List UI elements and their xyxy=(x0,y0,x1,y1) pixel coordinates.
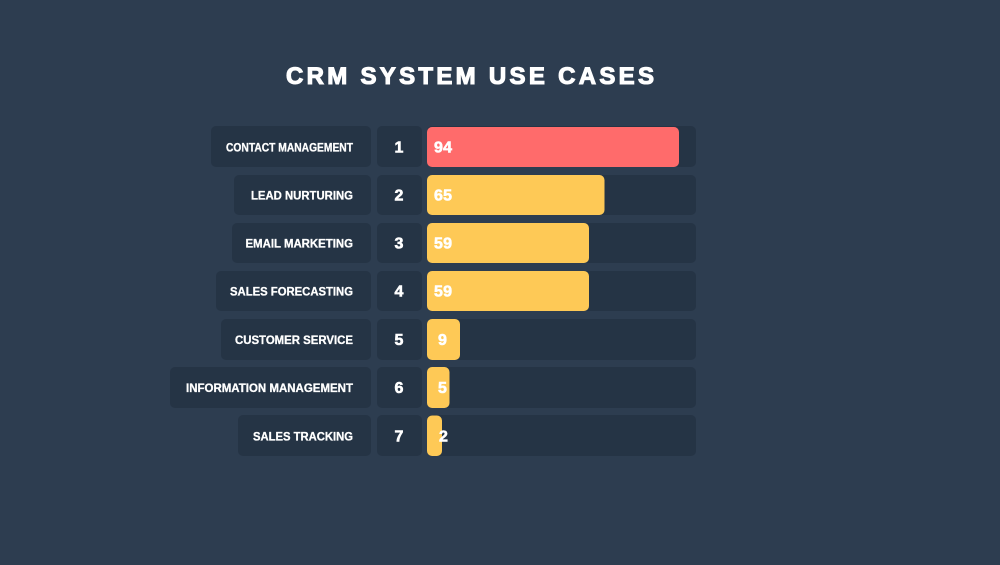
row 6: information management xyxy=(170,367,696,408)
title: CRM SYSTEM USE CASES xyxy=(286,63,654,90)
row 1: contact management: CONTACT MANAGEMENT xyxy=(226,140,354,154)
row 2: lead nurturing: 65 xyxy=(434,188,452,204)
row 6: information management: 6 xyxy=(395,380,404,397)
row 6: information management: 5 xyxy=(438,380,447,397)
row 7: sales tracking: 7 xyxy=(395,428,404,446)
row 6: information management: INFORMATION MANAGEMENT xyxy=(186,381,354,395)
row 1: contact management xyxy=(211,126,696,167)
row 5: customer service: 5 xyxy=(395,332,404,349)
row 5: customer service: 9 xyxy=(438,332,447,349)
row 3: email marketing xyxy=(232,223,696,263)
row 7: sales tracking: SALES TRACKING xyxy=(253,430,353,444)
row 2: lead nurturing: 2 xyxy=(395,188,404,204)
row 5: customer service xyxy=(221,319,696,360)
row 7: sales tracking: 2 xyxy=(439,428,448,446)
row 7: sales tracking xyxy=(238,415,696,456)
row 2: lead nurturing: LEAD NURTURING xyxy=(251,188,353,202)
bar chart xyxy=(170,126,696,456)
row 3: email marketing: 3 xyxy=(395,236,404,252)
row 3: email marketing: 59 xyxy=(434,236,452,252)
row 4: sales forecasting: 4 xyxy=(395,284,404,300)
row 3: email marketing: EMAIL MARKETING xyxy=(246,236,353,250)
row 1: contact management: 94 xyxy=(434,140,452,156)
row 5: customer service: CUSTOMER SERVICE xyxy=(235,333,353,347)
row 4: sales forecasting: 59 xyxy=(434,284,452,300)
row 1: contact management: 1 xyxy=(395,140,404,156)
row 4: sales forecasting: SALES FORECASTING xyxy=(230,284,353,298)
row 2: lead nurturing xyxy=(234,175,696,215)
row 4: sales forecasting xyxy=(216,271,696,311)
